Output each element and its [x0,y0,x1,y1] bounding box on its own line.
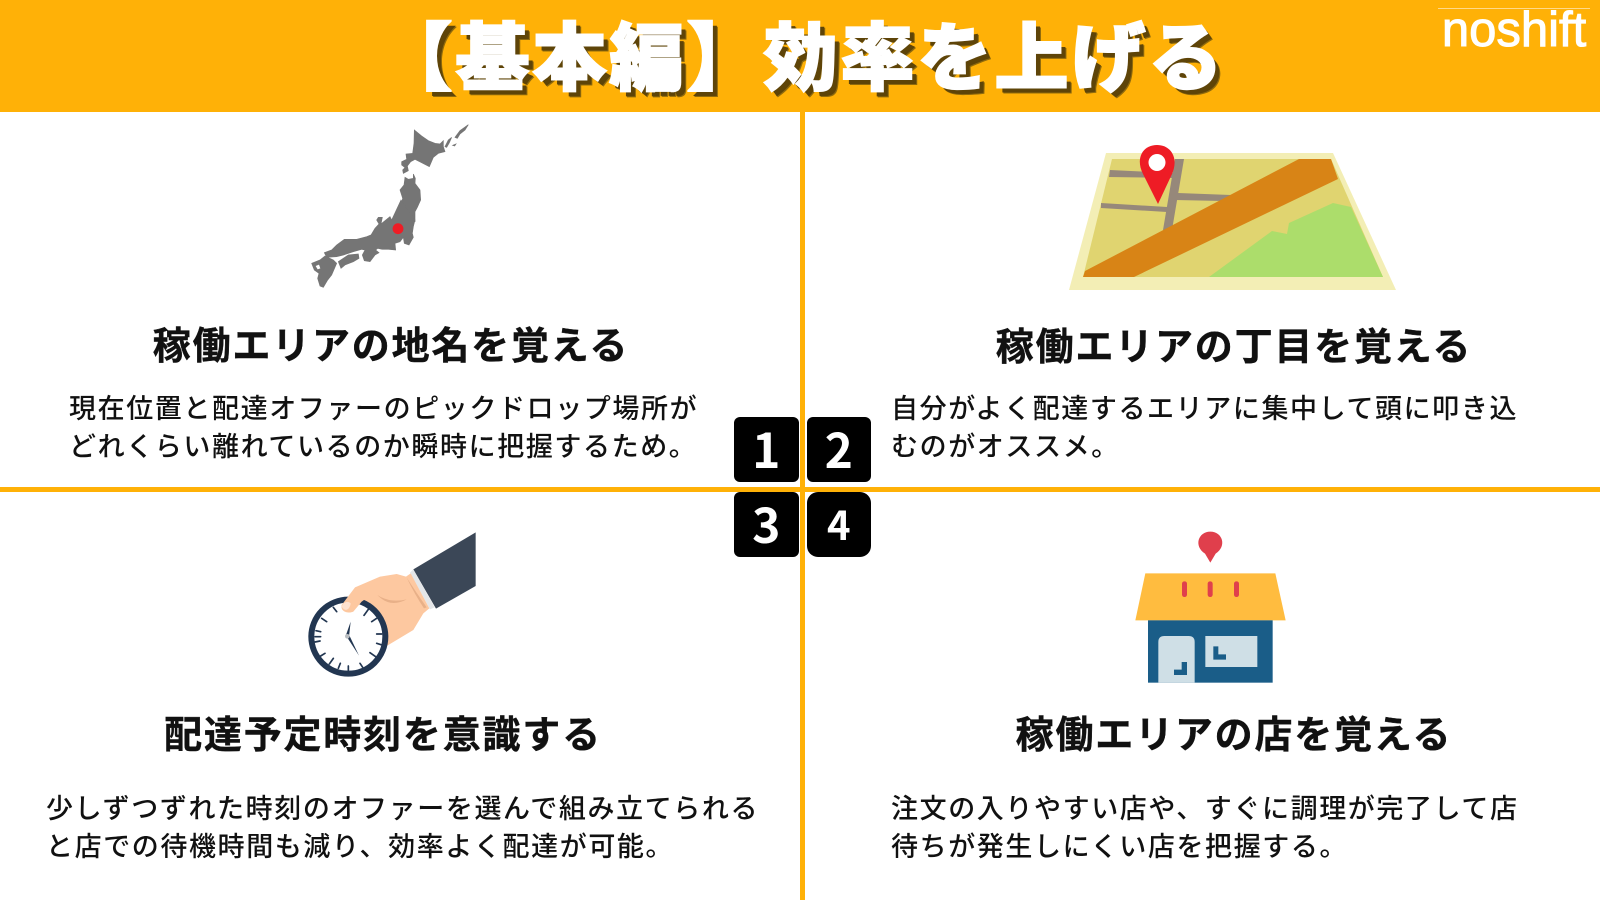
icon: hand holding clock [308,532,476,677]
body text 1: どれくらい離れているのか瞬時に把握するため。 [69,432,697,462]
badge 2 [806,417,871,482]
icon: road map with pin [1069,145,1396,290]
icon: Japan map [311,124,468,288]
body text 3: 少しずつずれた時刻のオファーを選んで組み立てられる [46,794,759,824]
body text 1: 現在位置と配達オファーのピックドロップ場所が [69,394,698,424]
header band [0,0,1600,112]
body text 4 [891,794,1519,862]
vertical divider [800,112,805,900]
body text 3 [46,794,759,862]
panel 1: place names [69,124,698,462]
icon: store with pin [1135,532,1286,683]
body text 2: むのがオススメ。 [891,432,1120,462]
badge 1 [734,417,798,482]
badge 4: 4 [827,494,851,552]
heading 3: 配達予定時刻を意識する [164,715,602,757]
panel 3: delivery time [46,532,759,862]
body text 1 [69,394,698,462]
panel 2: block addresses [891,145,1518,462]
body text 4: 注文の入りやすい店や、すぐに調理が完了して店 [891,794,1519,824]
badge 4 [806,492,871,556]
badge 3: 3 [752,487,780,557]
badge 1: 1 [752,412,780,482]
title: 【基本編】効率を上げる [378,17,1226,100]
panel 4: shops [891,532,1519,862]
body text 3: と店での待機時間も減り、効率よく配達が可能。 [46,832,674,862]
body text 2 [891,394,1518,462]
heading 4: 稼働エリアの店を覚える [1016,715,1452,757]
heading 1: 稼働エリアの地名を覚える [153,326,629,368]
badge 2: 2 [825,412,853,482]
body text 4: 待ちが発生しにくい店を把握する。 [891,832,1348,862]
badge 3 [734,492,798,556]
heading 2: 稼働エリアの丁目を覚える [996,327,1472,369]
body text 2: 自分がよく配達するエリアに集中して頭に叩き込 [891,394,1518,424]
logo: noshift: noshift [1442,3,1586,57]
horizontal divider [0,487,1600,492]
